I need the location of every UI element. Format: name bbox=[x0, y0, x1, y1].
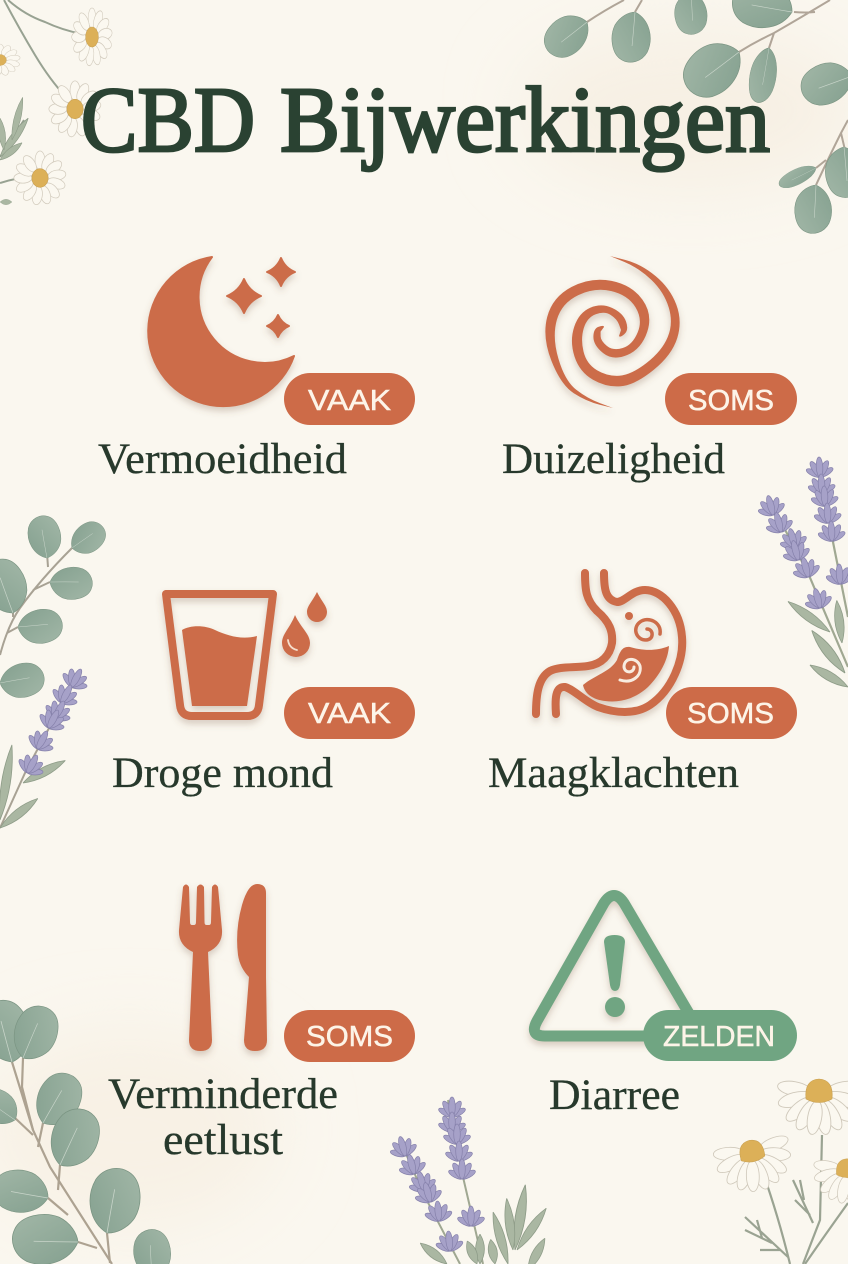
badge: ZELDEN bbox=[643, 1010, 797, 1061]
badge: SOMS bbox=[666, 687, 797, 739]
icon: crescent moon with stars bbox=[148, 257, 295, 406]
icon: stomach bbox=[536, 573, 682, 714]
item: Verminderde eetlust bbox=[108, 884, 415, 1164]
badge: SOMS bbox=[284, 1010, 415, 1062]
label: Verminderde eetlust: Verminderde bbox=[108, 1071, 338, 1118]
badge: ZELDEN: ZELDEN bbox=[663, 1021, 775, 1053]
item: Duizeligheid bbox=[502, 256, 797, 483]
badge: SOMS: SOMS bbox=[306, 1021, 393, 1053]
decoration: eucalyptus bottom left bbox=[0, 996, 171, 1264]
icon: glass of water with drops bbox=[166, 592, 327, 716]
decoration: chamomile top left bbox=[0, 0, 113, 205]
decoration: lavender right bbox=[754, 456, 848, 691]
badge: VAAK bbox=[284, 687, 415, 739]
title: Bijwerkingen bbox=[280, 69, 770, 172]
badge: VAAK bbox=[284, 373, 415, 425]
item: Vermoeidheid bbox=[98, 257, 415, 483]
decoration: chamomile bottom right bbox=[711, 1079, 848, 1264]
badge: SOMS bbox=[665, 373, 797, 425]
item: Maagklachten bbox=[488, 573, 797, 797]
title: CBD bbox=[81, 69, 255, 172]
label: Maagklachten: Maagklachten bbox=[488, 750, 739, 797]
label: Verminderde eetlust: eetlust bbox=[163, 1117, 283, 1164]
icon: warning triangle bbox=[534, 896, 694, 1036]
label: Droge mond: Droge mond bbox=[112, 750, 333, 797]
icon: fork and knife bbox=[179, 884, 267, 1051]
decoration: lavender bottom center bbox=[386, 1097, 550, 1264]
badge: SOMS: SOMS bbox=[688, 385, 774, 417]
item: Diarree bbox=[534, 896, 797, 1119]
decoration: eucalyptus and lavender left bbox=[0, 514, 111, 831]
decoration: eucalyptus top right bbox=[537, 0, 848, 236]
badge: SOMS: SOMS bbox=[687, 698, 774, 730]
icon: spiral bbox=[545, 256, 680, 408]
badge: VAAK: VAAK bbox=[308, 698, 392, 730]
badge: VAAK: VAAK bbox=[308, 385, 392, 417]
item: Droge mond bbox=[112, 592, 415, 797]
label: Vermoeidheid: Vermoeidheid bbox=[98, 436, 347, 483]
label: Diarree: Diarree bbox=[549, 1072, 680, 1119]
label: Duizeligheid: Duizeligheid bbox=[502, 436, 725, 483]
